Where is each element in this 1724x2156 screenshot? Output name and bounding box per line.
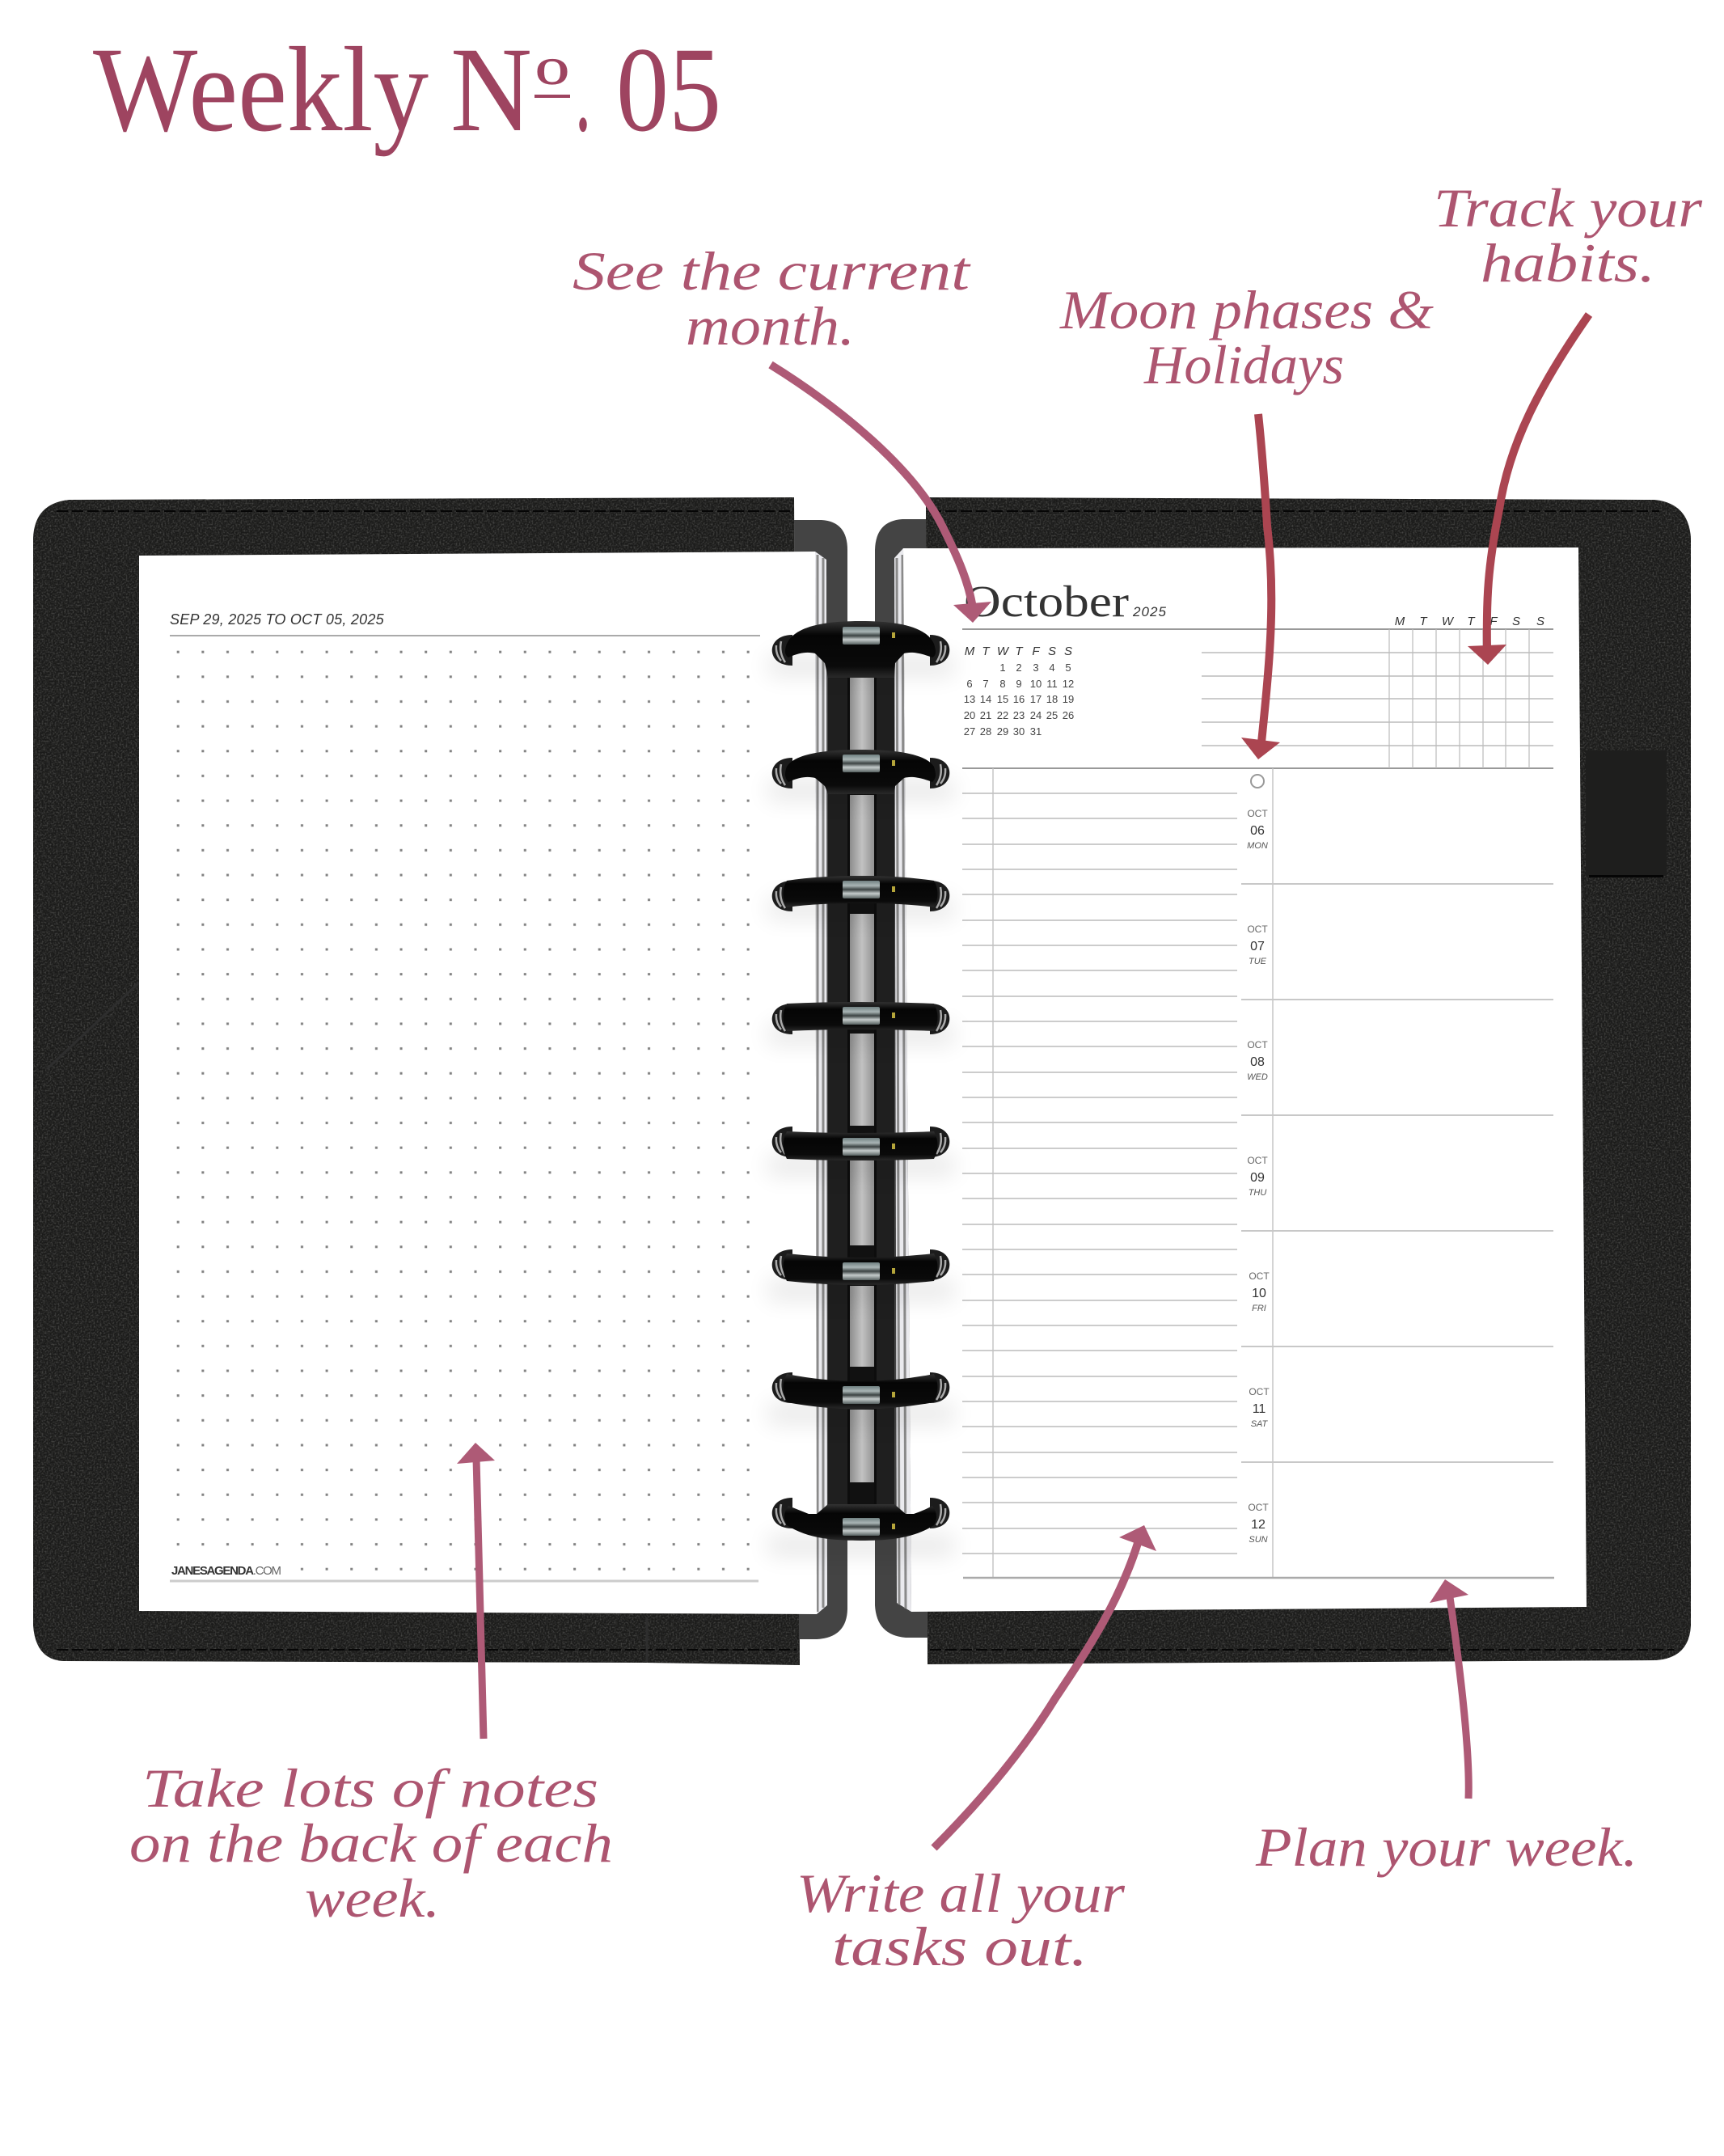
day label Friday [1249,1270,1270,1313]
left planner cover [33,497,800,1665]
day label Thursday: OCT [1247,1155,1268,1166]
day label Tuesday: 07 [1250,940,1265,953]
callout: moon phases: Holidays [1143,334,1344,395]
mini calendar: 21 [980,709,991,721]
habit tracker: T [1467,615,1476,628]
elastic band [1586,750,1667,877]
day label Monday: MON [1247,841,1268,851]
day label Wednesday: WED [1247,1072,1268,1082]
mini calendar: 28 [980,725,991,738]
binder tab right [875,519,927,1638]
callout: current month [573,240,972,357]
callout: moon phases [1059,279,1434,395]
callout: habits: Track your [1434,177,1703,239]
callout: tasks: Write all your [797,1862,1126,1924]
arrow: tasks [934,1525,1156,1848]
day label Friday: FRI [1252,1304,1266,1313]
footer brand: JANESAGENDA.COM [171,1564,281,1578]
left notes page [139,552,827,1614]
dot grid [170,643,757,1575]
day label Monday: 06 [1250,824,1265,838]
habit tracker: W [1442,615,1455,628]
title [93,23,721,157]
right planner cover [926,497,1691,1664]
mini calendar: 7 [982,678,989,690]
ring 2 [768,750,954,801]
day label Tuesday: TUE [1249,957,1267,966]
day label Sunday: 12 [1251,1518,1266,1532]
callout: current month: month. [686,295,855,357]
habit tracker: T [1419,615,1428,628]
mini calendar: 22 [997,709,1008,721]
mini calendar: S [1064,645,1072,658]
day label Wednesday: 08 [1250,1055,1265,1069]
moon phase circle [1251,775,1264,788]
mini calendar: 19 [1063,693,1074,705]
day label Tuesday [1247,924,1268,966]
mini calendar: W [997,645,1010,658]
title: 05 [616,23,721,157]
arrow: notes [457,1443,495,1739]
day label Saturday [1249,1386,1270,1429]
binding spine [828,636,894,1527]
mini calendar: S [1048,645,1056,658]
habit tracker: M [1395,615,1405,628]
page edge stack [894,548,911,1612]
arrow: habits [1468,315,1589,665]
mini calendar: 23 [1013,709,1025,721]
callout: current month: See the current [573,240,972,302]
ring 4 [768,1002,954,1045]
mini calendar: 3 [1033,662,1039,674]
ring 7 [768,1372,954,1424]
day label Saturday: SAT [1251,1419,1269,1429]
day label Sunday: OCT [1248,1502,1269,1513]
title: . [575,23,591,157]
task lines [962,793,1237,1554]
callout: notes: Take lots of notes [142,1757,598,1819]
arrow: current month [771,365,991,623]
binder rings [768,621,954,1556]
day label Sunday: SUN [1249,1535,1268,1545]
title: N [450,23,532,157]
mini calendar: 1 [999,662,1006,674]
day label Sunday [1248,1502,1269,1545]
ring 5 [768,1127,954,1176]
mini calendar: 5 [1065,662,1071,674]
mini calendar: 30 [1013,725,1025,738]
mini calendar: T [1015,645,1024,658]
mini calendar: 12 [1063,678,1074,690]
callout: plan week: Plan your week. [1255,1816,1637,1878]
arrow: plan week [1430,1579,1468,1799]
mini calendar: T [982,645,991,658]
mini calendar: 24 [1030,709,1042,721]
mini calendar: 25 [1046,709,1058,721]
mini calendar: 14 [980,693,991,705]
task and day column rules [993,768,1273,1578]
mini calendar: 31 [1030,725,1042,738]
title: Weekly [93,23,429,157]
day label Monday: OCT [1247,808,1268,819]
ring 1 [768,621,954,678]
ring 3 [768,876,954,919]
mini calendar: 27 [964,725,975,738]
callout: notes: on the back of each [129,1812,613,1874]
month heading: October [964,577,1129,626]
mini calendar [964,645,1074,738]
mini calendar: 4 [1049,662,1055,674]
day label Saturday: 11 [1253,1402,1266,1416]
mini calendar: 26 [1063,709,1074,721]
callout: tasks [797,1862,1126,1977]
day label Saturday: OCT [1249,1386,1270,1397]
habit tracker: S [1512,615,1520,628]
mini calendar: 9 [1016,678,1022,690]
arrow: moon phases [1241,414,1280,759]
mini calendar: 20 [964,709,975,721]
mini calendar: 8 [999,678,1006,690]
page edge stack [815,552,827,1614]
day label Wednesday [1247,1039,1268,1082]
ring 8 [768,1498,954,1556]
callout: habits: habits. [1481,232,1655,294]
title: º [535,39,569,137]
mini calendar: 11 [1046,678,1058,690]
mini calendar: F [1032,645,1040,658]
day label Tuesday: OCT [1247,924,1268,935]
habit tracker: S [1536,615,1544,628]
date range heading: SEP 29, 2025 TO OCT 05, 2025 [170,611,385,628]
mini calendar: 13 [964,693,975,705]
binder tab left [794,520,847,1639]
day rows [1241,884,1553,1462]
mini calendar: 16 [1013,693,1025,705]
day label Thursday [1247,1155,1268,1198]
mini calendar: 2 [1016,662,1022,674]
callout: habits [1434,177,1703,294]
mini calendar: 10 [1030,678,1042,690]
mini calendar: 18 [1046,693,1058,705]
habit tracker: F [1489,615,1498,628]
day label Friday: OCT [1249,1270,1270,1282]
day label Thursday: THU [1249,1188,1266,1198]
callout: notes [129,1757,613,1929]
day label Thursday: 09 [1250,1171,1265,1185]
ring 6 [768,1249,954,1300]
day label Monday [1247,808,1268,851]
callout: moon phases: Moon phases & [1059,279,1434,340]
day label Wednesday: OCT [1247,1039,1268,1051]
right weekly page [894,547,1587,1612]
callout: tasks: tasks out. [832,1916,1088,1977]
mini calendar: 17 [1030,693,1042,705]
mini calendar: 15 [997,693,1008,705]
mini calendar: 6 [966,678,973,690]
day label Friday: 10 [1252,1287,1266,1300]
habit tracker [1202,615,1553,768]
year: 2025 [1132,604,1167,619]
mini calendar: 29 [997,725,1008,738]
mini calendar: M [965,645,975,658]
callout: notes: week. [305,1867,440,1929]
